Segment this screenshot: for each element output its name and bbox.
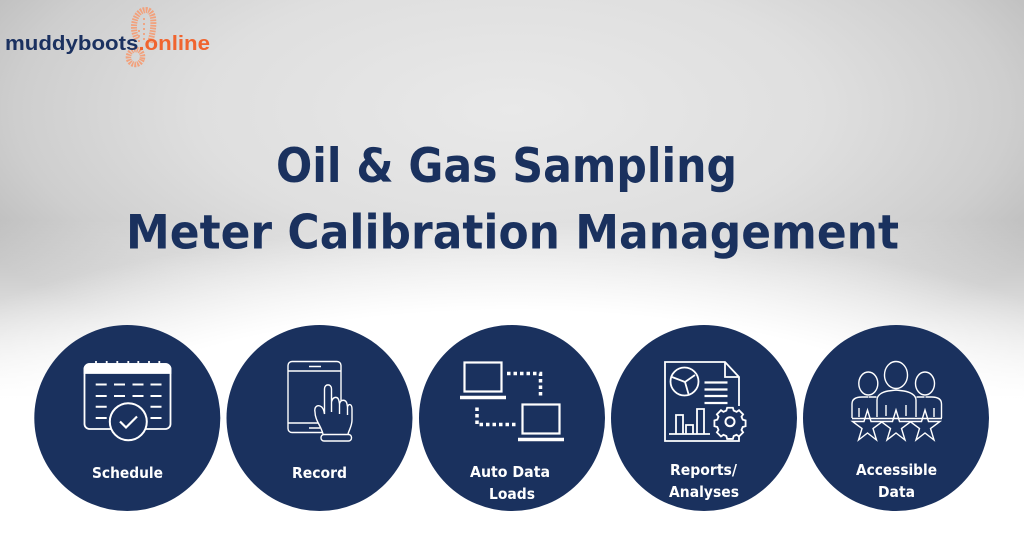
- icon: boot print: [126, 10, 153, 66]
- panel: accessible data: [803, 325, 989, 511]
- panel: record: [226, 325, 412, 511]
- label: Record: Record: [292, 464, 347, 482]
- icon: two laptops with dotted link: [460, 362, 564, 440]
- panel: reports analyses: [611, 325, 797, 511]
- label: Accessible Data: [856, 461, 937, 501]
- title line 1: Oil & Gas Sampling: [276, 139, 737, 194]
- label: Auto Data Loads: Loads: [489, 485, 535, 503]
- label: Reports/ Analyses: [669, 461, 739, 501]
- panel: schedule: [34, 325, 220, 511]
- title: [126, 139, 899, 260]
- icon: three people with stars: [852, 362, 942, 440]
- logo: muddyboots.online: [5, 10, 210, 66]
- icon: calendar with check: [84, 361, 170, 440]
- title line 2: Meter Calibration Management: [126, 206, 899, 260]
- logo wordmark: muddyboots .online: [5, 32, 210, 55]
- icon: report with charts and gear: [665, 362, 746, 441]
- label: Accessible Data: Accessible: [856, 461, 937, 479]
- label: Auto Data Loads: Auto Data: [470, 463, 550, 481]
- panel: auto data loads: [419, 325, 605, 511]
- label: Auto Data Loads: [470, 463, 550, 503]
- label: Reports/ Analyses: Reports/: [670, 461, 737, 479]
- label: Schedule: Schedule: [92, 464, 163, 482]
- label: Reports/ Analyses: Analyses: [669, 483, 739, 501]
- icon: tablet with tapping hand: [288, 362, 352, 441]
- label: Accessible Data: Data: [878, 483, 915, 501]
